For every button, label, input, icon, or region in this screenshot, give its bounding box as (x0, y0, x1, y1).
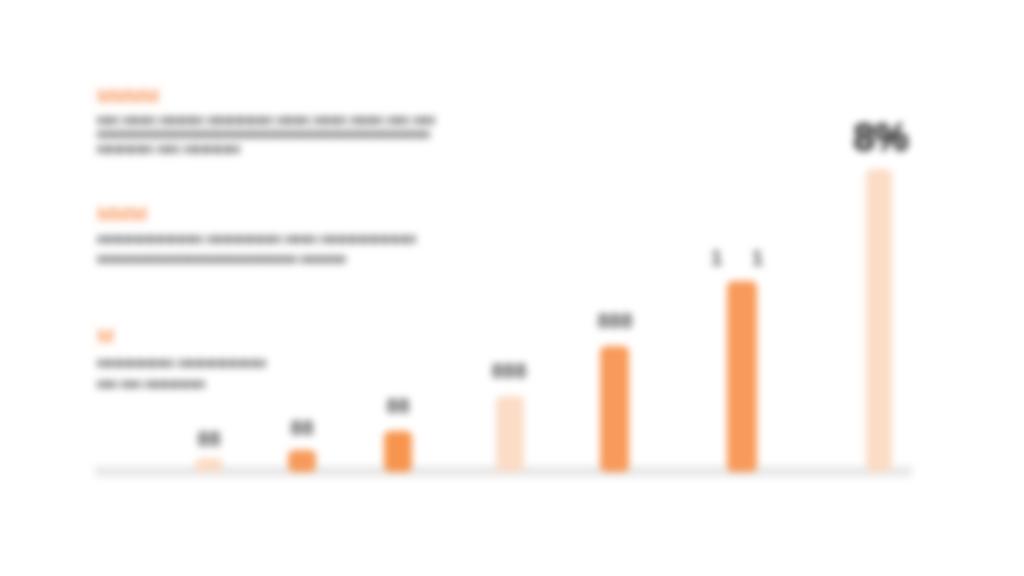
bar 6 (711, 247, 764, 472)
bar 2: 88 (290, 417, 314, 440)
bar 7 (854, 117, 908, 472)
note 2 body text (97, 232, 416, 267)
bar 6: 1 1 (711, 247, 764, 270)
note 3 body text: HHHHHHH HHHHHHHH (97, 356, 266, 371)
note 2 body text: HHHHHHHHHHHHHHHHHHHHHH HHHHH (97, 252, 346, 267)
note 3 body text (97, 356, 266, 392)
note 2 body text: HHHHHHHHHH HHHHHHH HHH HHHHHHHHH (97, 232, 416, 247)
note 1 body text: HHHHH HH HHHHH (97, 142, 240, 157)
bar 4: 888 (491, 360, 527, 383)
note 2 heading: MMM (97, 205, 147, 226)
bar 3: 88 (386, 395, 410, 418)
note 3 body text: HH HH HHHHHH (97, 377, 205, 392)
note 3 heading: M (97, 327, 114, 348)
bar 1: 88 (197, 428, 221, 451)
chart baseline (95, 466, 912, 477)
bar 2 (288, 417, 316, 472)
note block 1 (97, 87, 435, 157)
bar 3 (384, 395, 412, 472)
bar 5 (597, 310, 633, 472)
bar 4 (491, 360, 527, 472)
bar 7: 8% (854, 117, 908, 159)
note 1 body text (97, 113, 435, 157)
note 1 body text: HH HHH HHHH HHHHHH HHH HHH HHH HH HH (97, 113, 435, 128)
note 1 body text: HHHHHHHHHHHHHHHHHHHHHHHHHHHHHHHHHHHHHHHH (97, 127, 430, 142)
note 1 heading: MMMM (97, 87, 159, 108)
bar chart (95, 117, 912, 477)
note block 3 (97, 327, 266, 392)
note block 2 (97, 205, 416, 267)
bar 1 (195, 428, 223, 472)
bar 5: 888 (597, 310, 633, 333)
